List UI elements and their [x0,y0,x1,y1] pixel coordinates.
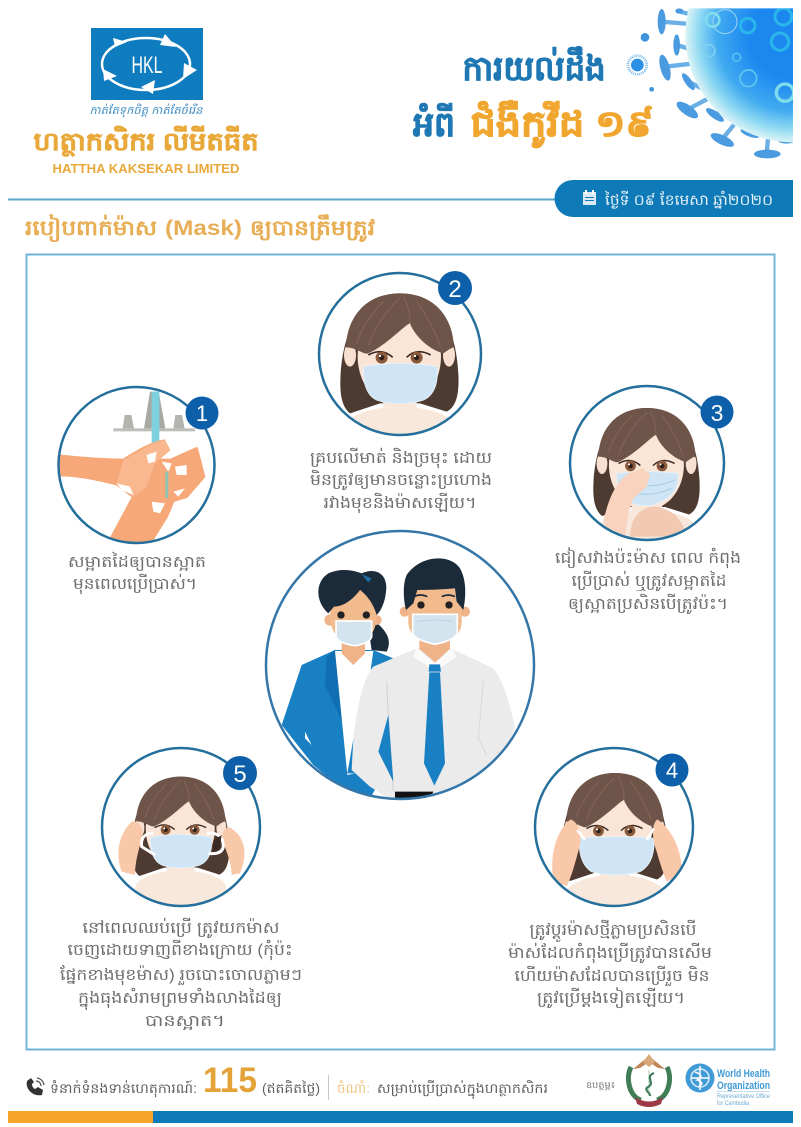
company name English: HATTHA KAKSEKAR LIMITED [52,161,240,176]
step 5: remove mask [60,748,302,1030]
company name Khmer: ហត្ថាកសិករ លីមីតធីត [34,125,258,157]
step 2: cover mouth and nose [310,271,492,514]
step 4 caption: ហើយម៉ាសដែលបានប្រើរួច មិន [514,965,710,987]
step 3 caption: ជៀសវាងប៉ះម៉ាស ពេល កំពុង [555,547,741,569]
logo: HKL: HKL [132,52,162,79]
icon: calendar [583,190,596,205]
step 5 caption [60,917,302,1030]
icon: phone [27,1078,44,1095]
badge 5 [223,756,257,790]
step 5 caption: ក្នុងធុងសំរាមព្រមទាំងលាងដៃឲ្យ [78,987,282,1011]
section heading: ឲ្យបានត្រឹមត្រូវ [250,214,375,243]
footer contact [27,1061,548,1100]
logo: World Health Organization: for Cambodia [717,1101,750,1107]
woman [282,570,393,798]
bottom bar [8,1111,793,1123]
step 5 caption: បានស្អាត។ [145,1013,225,1030]
footer contact: ទំនាក់ទំនងទាន់ហេតុការណ៍: [50,1080,197,1098]
step 4: replace damp mask [508,748,712,1009]
date pill: ថ្ងៃទី ០៩ ខែមេសា ឆ្នាំ២០២០ [604,190,773,209]
badge 4 [656,754,688,786]
badge 2 [438,271,472,305]
section heading: (Mask) [165,217,242,240]
step 5 caption: ចេញដោយទាញពីខាងក្រោយ (កុំប៉ះ [68,939,292,961]
step 1 caption [68,551,206,595]
step 2 caption: គ្របលើមាត់ និងច្រមុះ ដោយ [310,447,492,469]
step 3 caption [555,547,741,615]
sponsor label: ឧបត្ថម្ភ៖ [586,1080,615,1091]
badge 3: 3 [711,400,723,426]
header title [413,46,654,148]
emblem: ministry of health [628,1054,670,1107]
step 1 caption: សម្អាតដៃឲ្យបានស្អាត [68,551,206,571]
logo tagline: កាត់តែទុកចិត្ត កាត់តែចំរើន [90,103,204,118]
step 4 caption: ត្រូវប្តូរម៉ាសថ្មីភ្លាមប្រសិនបើ [530,919,696,943]
badge 1 [186,396,218,430]
man [352,558,515,800]
logo: HKL [91,28,203,100]
logo: World Health Organization: Representative Office [717,1094,771,1100]
badge 5: 5 [233,761,247,788]
footer contact: ចំណាំ: [337,1080,370,1096]
date pill [554,180,793,217]
step 5 caption: ផ្នែកខាងមុខម៉ាស) រួចបោះចោលភ្លាមៗ [60,965,302,986]
badge 4: 4 [666,758,678,783]
logo: World Health Organization [686,1064,771,1107]
step 2 caption: មិនត្រូវឲ្យមានចន្លោះប្រហោង [310,469,492,491]
step 5 caption: នៅពេលឈប់ប្រើ ត្រូវយកម៉ាស [82,917,280,939]
step 1 caption: មុនពេលប្រើប្រាស់។ [73,573,197,595]
footer contact: 115 [203,1061,257,1100]
step 4 caption: ម៉ាស់ដែលកំពុងប្រើត្រូវបានសើម [508,942,712,964]
step 4 caption: ត្រូវប្រើម្តងទៀតឡើយ។ [537,987,685,1009]
step 2 caption: រវាងមុខនិងម៉ាសឡើយ។ [324,492,476,514]
header title: ជំងឺកូវីដ ១៩ [470,100,654,148]
footer contact: សម្រាប់ប្រើប្រាស់ក្នុងហត្ថាកសិករ [377,1080,548,1099]
step 2 caption [310,447,492,514]
step 1: wash hands [58,387,218,595]
header title: អំពី [413,103,455,144]
step 3: avoid touching mask [555,386,741,615]
header title: ការយល់ដឹង [462,46,606,88]
step 4 caption [508,919,712,1009]
center illustration: man and woman wearing masks [266,531,534,800]
header line [8,198,556,200]
step 3 caption: ឲ្យស្អាតប្រសិនបើត្រូវប៉ះ។ [568,593,728,615]
section heading [25,214,375,243]
section heading: របៀបពាក់ម៉ាស [25,214,157,243]
panel frame [26,254,774,1050]
footer contact: (ឥតគិតថ្លៃ) [262,1080,320,1097]
logo: World Health Organization: World Health [717,1068,770,1080]
logo: World Health Organization: Organization [717,1080,770,1092]
badge 2: 2 [448,276,462,303]
badge 3 [700,396,734,428]
virus illustration [628,0,801,158]
badge 1: 1 [196,401,208,426]
step 3 caption: ប្រើប្រាស់ ឬត្រូវសម្អាតដៃ [572,570,726,592]
